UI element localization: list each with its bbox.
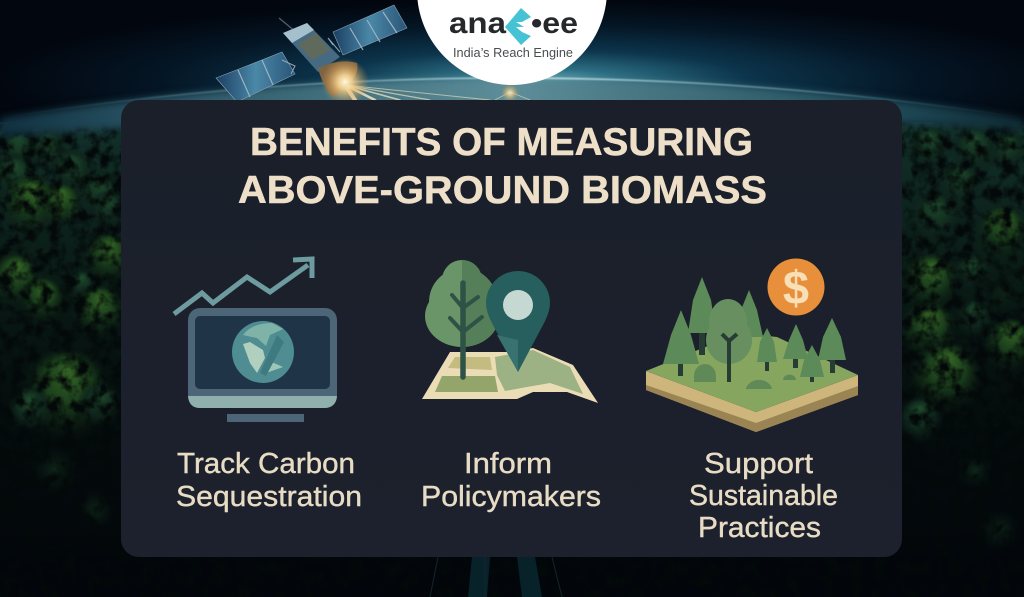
main panel <box>121 100 902 557</box>
satellite lower solar panel <box>216 52 295 102</box>
logo mark <box>505 8 531 45</box>
title: BENEFITS OF MEASURING <box>250 121 753 164</box>
dollar coin <box>768 258 824 316</box>
satellite body <box>283 23 340 72</box>
rising arrow <box>174 259 312 314</box>
road at bottom of forest <box>430 557 562 597</box>
bushes <box>694 364 796 389</box>
horizon rim light <box>0 78 1024 118</box>
label: track carbon sequestration: Track Carbon <box>177 448 355 480</box>
label: inform policymakers <box>421 448 601 513</box>
icon: tree, location pin and map <box>422 260 598 403</box>
logo tagline: India’s Reach Engine <box>453 45 573 60</box>
satellite upper solar panel <box>333 5 407 55</box>
label: track carbon sequestration <box>176 448 362 513</box>
logo wordmark <box>449 7 578 40</box>
logo wordmark: •ee <box>531 7 578 40</box>
icon: forest land block with dollar coin <box>646 258 858 432</box>
earth atmosphere haze <box>0 78 1024 136</box>
logo badge <box>417 0 607 85</box>
forest canopy <box>0 122 1024 597</box>
location pin <box>486 271 550 372</box>
title <box>238 121 767 212</box>
label: support sustainable practices: Practices <box>698 512 821 544</box>
land block <box>646 333 858 432</box>
conifer trees <box>663 277 846 382</box>
logo wordmark: ana <box>449 7 506 40</box>
satellite antenna <box>279 18 296 32</box>
satellite beams <box>345 85 530 100</box>
label: inform policymakers: Policymakers <box>421 481 601 513</box>
tree <box>425 260 499 377</box>
icon: monitor with globe and rising arrow <box>174 259 337 422</box>
label: support sustainable practices <box>689 448 838 544</box>
satellite engine flare <box>321 58 369 106</box>
label: track carbon sequestration: Sequestration <box>176 481 362 513</box>
label: support sustainable practices: Support <box>704 448 813 480</box>
globe <box>232 321 294 383</box>
map <box>422 348 598 403</box>
label: support sustainable practices: Sustainable <box>689 480 838 512</box>
trees <box>663 277 846 382</box>
label: inform policymakers: Inform <box>464 448 552 480</box>
satellite dish <box>318 61 358 97</box>
satellite <box>216 5 530 106</box>
round tree <box>706 299 752 382</box>
title: ABOVE-GROUND BIOMASS <box>238 169 767 212</box>
monitor <box>188 308 337 422</box>
dollar coin: $ <box>783 261 809 314</box>
